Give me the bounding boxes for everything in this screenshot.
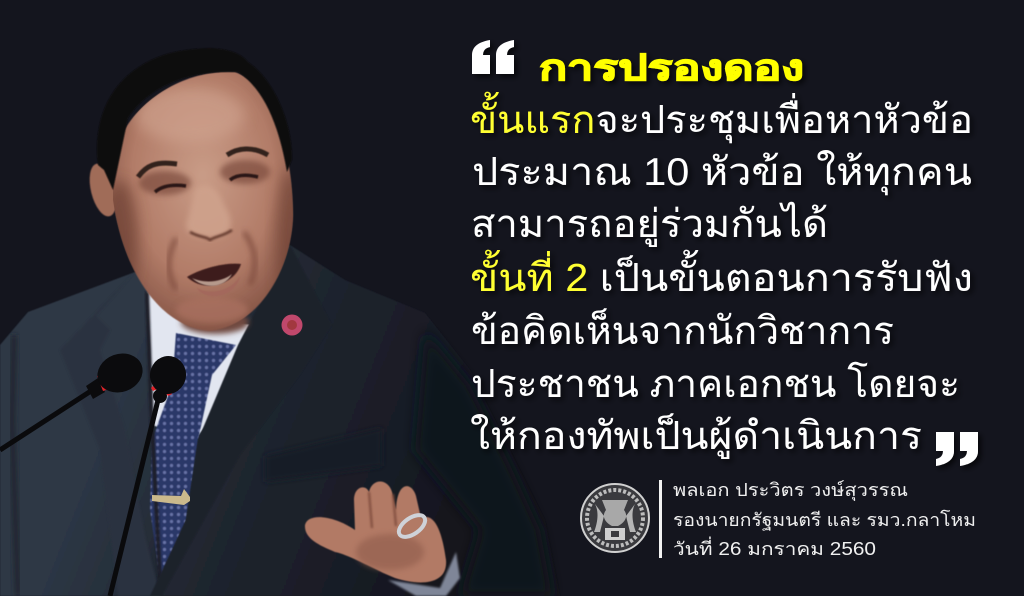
divider: [659, 480, 662, 558]
line 6: ประชาชน ภาคเอกชน โดยจะ: [471, 362, 960, 406]
name: พลเอก ประวิตร วงษ์สุวรรณ: [673, 480, 908, 501]
tie: [150, 333, 236, 580]
ear: [85, 161, 121, 219]
closing quote mark: [936, 432, 978, 466]
opening quote mark: [472, 40, 514, 74]
heading: การปรองดอง: การปรองดอง: [539, 47, 804, 88]
pocket: [265, 428, 382, 482]
face: [113, 72, 293, 331]
ring: [395, 511, 429, 541]
eyes: [155, 175, 258, 192]
line 1: ขั้นแรกจะประชุมเพื่อหาหัวข้อ: [470, 91, 973, 144]
sleeve shadow: [415, 330, 552, 596]
shirt cuff: [388, 552, 460, 596]
right lapel: [150, 245, 332, 596]
line 3: สามารถอยู่ร่วมกันได้: [471, 202, 828, 247]
hair: [97, 48, 292, 190]
tie clip: [152, 489, 190, 505]
microphone right: [110, 353, 189, 596]
left lapel: [60, 272, 160, 596]
nose: [186, 185, 231, 238]
mouth: [187, 264, 241, 286]
shirt: [147, 292, 252, 440]
quote text block: [470, 40, 978, 466]
hand: [305, 482, 460, 596]
position: รองนายกรัฐมนตรี และ รมว.กลาโหม: [673, 509, 976, 531]
lapel pin: [282, 314, 302, 336]
photo: speaker: [0, 48, 560, 596]
line 7: ให้กองทัพเป็นผู้ดำเนินการ: [470, 412, 922, 459]
collar edge shadow: [147, 292, 160, 580]
attribution text: [673, 480, 976, 559]
line 5: ข้อคิดเห็นจากนักวิชาการ: [471, 307, 894, 353]
eyebrows: [138, 149, 268, 177]
emblem seal: [581, 484, 649, 552]
left sleeve seam: [12, 335, 18, 596]
date: วันที่ 26 มกราคม 2560: [673, 536, 876, 559]
face shading: [102, 87, 304, 323]
suit jacket: [0, 245, 560, 596]
microphone left: [0, 347, 148, 450]
line 4: ขั้นที่ 2 เป็นขั้นตอนการรับฟัง: [470, 249, 973, 300]
line 2: ประมาณ 10 หัวข้อ ให้ทุกคน: [472, 150, 972, 196]
neck shadow: [181, 310, 249, 334]
